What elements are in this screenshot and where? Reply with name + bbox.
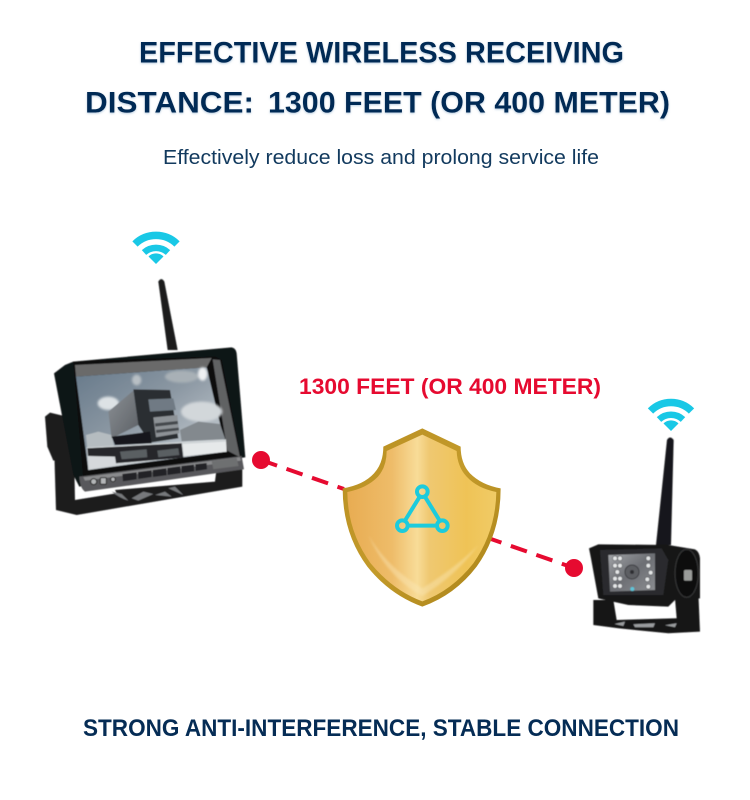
title: DISTANCE: [85,86,254,120]
red node: right [565,559,583,577]
white patch right [183,442,227,456]
control bar rim [83,457,241,481]
title: EFFECTIVE WIRELESS RECEIVING [139,36,624,70]
screen [76,367,227,470]
mountains right [180,422,225,441]
grille bars [155,421,179,433]
title: 1300 FEET (OR 400 METER) [268,86,670,120]
hood inner right [213,359,240,457]
mount bolt [684,570,692,581]
dashed link: left [261,460,344,489]
grille [153,415,179,437]
camera antenna [656,437,674,545]
antenna [158,279,178,350]
monitor [45,279,245,515]
bezel [73,357,241,478]
camera [589,437,700,633]
title [85,36,670,120]
shield [343,428,501,607]
windshield [148,398,176,412]
shield highlight [368,535,478,596]
truck cab [133,389,178,443]
sky [76,367,227,470]
wheels [112,432,152,445]
housing [54,347,245,487]
status led [630,587,634,591]
water band [87,439,227,470]
reflection highlights [120,448,179,459]
hood inner top [75,358,212,377]
clouds [98,367,222,422]
distance label: 1300 FEET (OR 400 METER) [299,374,601,399]
shield rim [343,428,501,607]
subtitle: Effectively reduce loss and prolong service life [163,147,599,169]
buttons [122,463,207,481]
side mount [675,549,698,597]
control bar [79,456,244,492]
wifi icon: monitor [135,235,177,264]
camera bracket [593,592,700,633]
dashed link: right [491,539,574,568]
bottom tagline: STRONG ANTI-INTERFERENCE, STABLE CONNECTION [83,715,679,742]
LEDs [613,556,653,589]
camera housing [589,544,700,607]
speaker panel [212,458,239,469]
mountains left [86,432,114,448]
red node: left [252,451,270,469]
lens panel [608,553,655,592]
bracket slots [614,622,677,627]
network triangle icon [397,486,448,531]
reflection [87,443,183,463]
bracket [53,420,242,515]
indicator lights [91,477,115,485]
lens [625,565,639,579]
white patch left [88,453,116,469]
wifi icon: camera [650,403,692,431]
side clamp [45,413,72,461]
truck trailer [108,391,138,438]
bracket slots [112,487,183,501]
shield face [347,435,496,601]
window frame [600,548,668,595]
